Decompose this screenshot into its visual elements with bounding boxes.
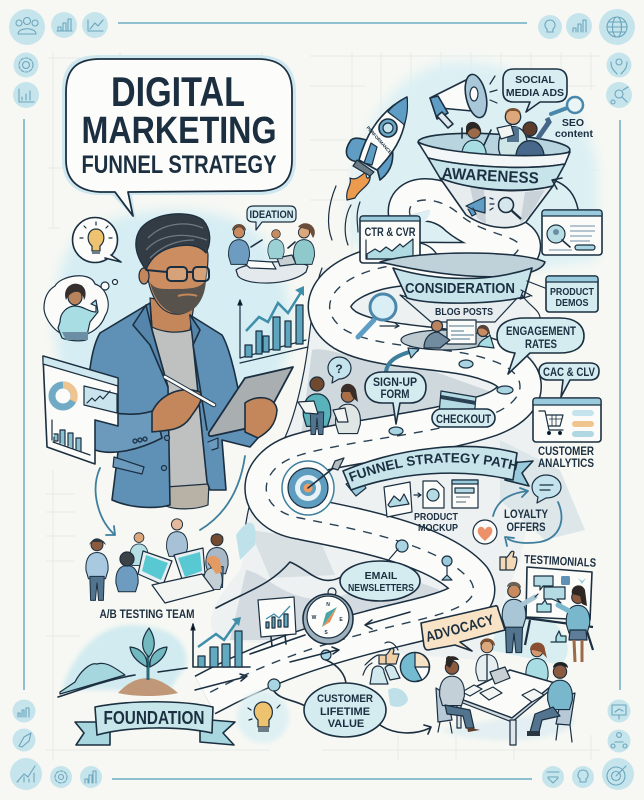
icon: chart small <box>12 700 36 722</box>
consideration funnel <box>380 253 545 322</box>
presenter figure <box>86 214 293 509</box>
dashboard panel <box>43 356 118 464</box>
magnifier on road <box>358 294 399 337</box>
icon: growth large <box>10 758 42 790</box>
arrow: demos to consideration <box>521 281 545 296</box>
meeting table scene <box>436 638 575 745</box>
customer lifetime value bubble: CUSTOMER <box>317 693 373 705</box>
flipchart <box>250 597 305 654</box>
hair highlights <box>146 224 207 258</box>
social media ads bubble <box>503 69 567 112</box>
icon: org <box>608 730 630 752</box>
sleeve <box>92 410 162 452</box>
icon: lightbulb <box>538 15 562 39</box>
ideation label <box>247 206 296 230</box>
road: winding funnel strategy path <box>205 200 520 695</box>
arrow: CTR to road <box>420 243 443 265</box>
small bars <box>52 420 90 455</box>
trousers <box>165 482 209 509</box>
seated orange hair <box>204 568 222 590</box>
woman at board <box>558 585 590 662</box>
map pin <box>442 556 452 580</box>
rocket <box>329 97 408 245</box>
top border line <box>118 22 527 24</box>
CAC and CLV bubble <box>539 363 599 397</box>
beard <box>150 280 206 314</box>
bar chart: foundation <box>158 617 250 672</box>
funnel strategy path ribbon <box>342 446 534 497</box>
customer lifetime value bubble: LIFETIME <box>320 706 370 718</box>
icon: bars bottom <box>80 766 102 788</box>
CAC and CLV bubble: CAC & CLV <box>543 365 595 379</box>
engagement rates bubble: ENGAGEMENT <box>506 326 576 338</box>
pie chart <box>400 652 430 682</box>
road waypoints <box>268 360 513 691</box>
icon: hands <box>606 52 632 78</box>
hair <box>136 214 210 270</box>
testimonials: TESTIMONIALS <box>524 552 597 570</box>
chair left <box>436 688 452 733</box>
watercolor wash: behind awareness funnel <box>350 62 598 285</box>
funnel front wall <box>418 142 570 167</box>
icon: target <box>602 758 634 790</box>
product mockup label <box>414 511 458 534</box>
cone megaphone <box>466 197 485 216</box>
loyalty offers: LOYALTY <box>504 507 548 521</box>
monitor left <box>138 551 172 585</box>
mountain <box>211 250 585 665</box>
right border line <box>619 120 621 690</box>
icon: presentation <box>608 700 630 722</box>
papers <box>462 685 544 702</box>
foundation banner <box>75 702 235 745</box>
desk <box>152 574 214 603</box>
blog posts scene <box>401 320 494 350</box>
two people on hill <box>298 377 360 434</box>
blog posts label: BLOG POSTS <box>435 306 493 318</box>
title speech bubble: FUNNEL STRATEGY <box>82 151 277 179</box>
watercolor wash: foundation sprout <box>62 625 186 690</box>
ear <box>139 268 149 284</box>
compass: N <box>326 602 330 608</box>
icon: bars <box>51 12 77 38</box>
sign-up form bubble: SIGN-UP <box>373 377 417 389</box>
stylus <box>165 377 214 405</box>
compass: W <box>312 615 317 621</box>
icon: rocket small <box>12 728 36 752</box>
back persons <box>476 654 498 681</box>
tablet <box>209 367 293 436</box>
thought cloud: woman with clipboard <box>44 276 118 341</box>
man right <box>548 680 572 710</box>
presenter at board <box>502 582 538 653</box>
checkout pill <box>432 409 495 427</box>
A/B testing team label: A/B TESTING TEAM <box>100 607 194 621</box>
email newsletters bubble: NEWSLETTERS <box>348 582 414 594</box>
title text: DIGITAL <box>111 68 245 115</box>
email newsletters bubble: EMAIL <box>365 570 398 582</box>
neck <box>150 298 194 332</box>
awareness band <box>428 158 565 190</box>
icon: people <box>9 9 45 45</box>
icon: growth <box>13 82 39 108</box>
email newsletters bubble <box>340 549 420 601</box>
road direction arrows <box>195 612 410 690</box>
hand with stylus <box>152 390 201 432</box>
cone magnifier <box>498 198 514 212</box>
testimonials board <box>525 567 593 650</box>
customer analytics label: ANALYTICS <box>538 458 594 470</box>
advocacy label: ADVOCACY <box>424 612 496 646</box>
sign-up form bubble <box>365 348 426 424</box>
pocket <box>113 438 218 474</box>
sprout and mound <box>58 628 178 697</box>
icon: network <box>606 82 632 108</box>
jacket right <box>190 315 258 490</box>
icon: trend <box>82 12 108 38</box>
product mockup label: PRODUCT <box>414 511 458 523</box>
checkout pill: CHECKOUT <box>436 412 492 426</box>
donut chart <box>52 385 74 407</box>
title speech bubble <box>62 55 296 220</box>
title speech bubble: MARKETING <box>82 110 276 152</box>
rocket: PERFORMANCE <box>365 125 393 155</box>
awareness funnel <box>417 108 571 228</box>
monitor right <box>174 548 205 582</box>
testimonials <box>500 551 597 570</box>
consideration text: CONSIDERATION <box>405 281 515 297</box>
customer analytics label <box>538 446 595 470</box>
SEO content label: SEO <box>562 117 584 129</box>
lightbulb thought <box>72 218 121 262</box>
CTR and CVR panel <box>360 216 420 263</box>
ideation team <box>229 223 315 283</box>
arrow: presenter to team <box>96 456 245 535</box>
heart bubble <box>473 520 497 544</box>
compass: S <box>324 630 328 636</box>
product demos window <box>546 276 598 312</box>
funnel lower cone <box>440 178 553 228</box>
social media ads bubble: SOCIAL <box>515 74 555 86</box>
SEO content label: content <box>555 128 593 140</box>
table top <box>455 670 555 718</box>
social media ads bubble: MEDIA ADS <box>506 87 564 99</box>
compass: E <box>339 617 343 623</box>
t-shirt <box>150 325 208 487</box>
table legs <box>457 686 555 745</box>
customer lifetime value bubble <box>274 660 386 737</box>
question bubble: ? <box>335 362 343 376</box>
laptop <box>490 667 510 684</box>
customer analytics window <box>533 398 601 442</box>
customer analytics label: CUSTOMER <box>538 446 595 458</box>
awareness funnel: AWARENESS <box>441 165 539 188</box>
icon: globe <box>599 9 635 45</box>
A/B testing team <box>86 519 228 603</box>
bottom border line <box>112 778 532 780</box>
engagement rates bubble: RATES <box>525 339 557 351</box>
CTR and CVR panel: CTR & CVR <box>364 225 416 239</box>
floor shadow <box>440 715 575 740</box>
icon: gear bottom <box>50 766 72 788</box>
compass <box>303 588 353 644</box>
engagement rates bubble <box>497 291 584 374</box>
woman left <box>440 676 464 706</box>
seated colleague <box>116 565 138 592</box>
arrow: lifetime value to table <box>380 725 431 734</box>
icon: bulb bottom <box>572 766 594 788</box>
bar chart: growth <box>238 286 308 363</box>
icon: bars right <box>566 13 592 39</box>
people in funnel <box>462 140 486 170</box>
target <box>282 458 344 515</box>
loyalty arrows <box>493 488 528 516</box>
left border line <box>23 119 25 690</box>
product demos window: PRODUCT <box>550 286 594 298</box>
jacket lapels <box>133 305 207 430</box>
product mockup label: MOCKUP <box>418 522 458 534</box>
product mockup icons <box>384 480 478 517</box>
foundation text: FOUNDATION <box>104 708 204 728</box>
funnel back rim <box>417 130 571 162</box>
loyalty offers <box>473 475 561 546</box>
mouth <box>178 294 197 296</box>
social proof icons <box>363 642 430 707</box>
magnifier: SEO <box>551 97 583 114</box>
loyalty offers: OFFERS <box>506 520 546 534</box>
question bubble <box>328 357 351 383</box>
customer lifetime value bubble: VALUE <box>328 718 364 730</box>
search window <box>542 210 602 255</box>
arrow: search to awareness <box>552 178 578 209</box>
funnel strategy path text: FUNNEL STRATEGY PATH <box>348 453 518 482</box>
jacket left <box>86 303 170 507</box>
chat bubble <box>532 475 561 503</box>
glasses <box>146 267 209 281</box>
sign-up form bubble: FORM <box>380 389 410 401</box>
sparkle lightbulb <box>237 691 289 743</box>
tablet hand <box>245 398 277 438</box>
SEO content label <box>555 117 593 140</box>
chair right <box>556 693 575 742</box>
credit card <box>439 391 476 418</box>
megaphone <box>430 72 497 128</box>
watercolor wash: behind presenter <box>54 210 290 395</box>
ideation label: IDEATION <box>250 209 294 221</box>
face <box>146 240 208 314</box>
icon: dollars <box>542 766 564 788</box>
buttons <box>133 436 170 470</box>
icon: gear <box>14 52 38 78</box>
product demos window: DEMOS <box>556 297 588 309</box>
